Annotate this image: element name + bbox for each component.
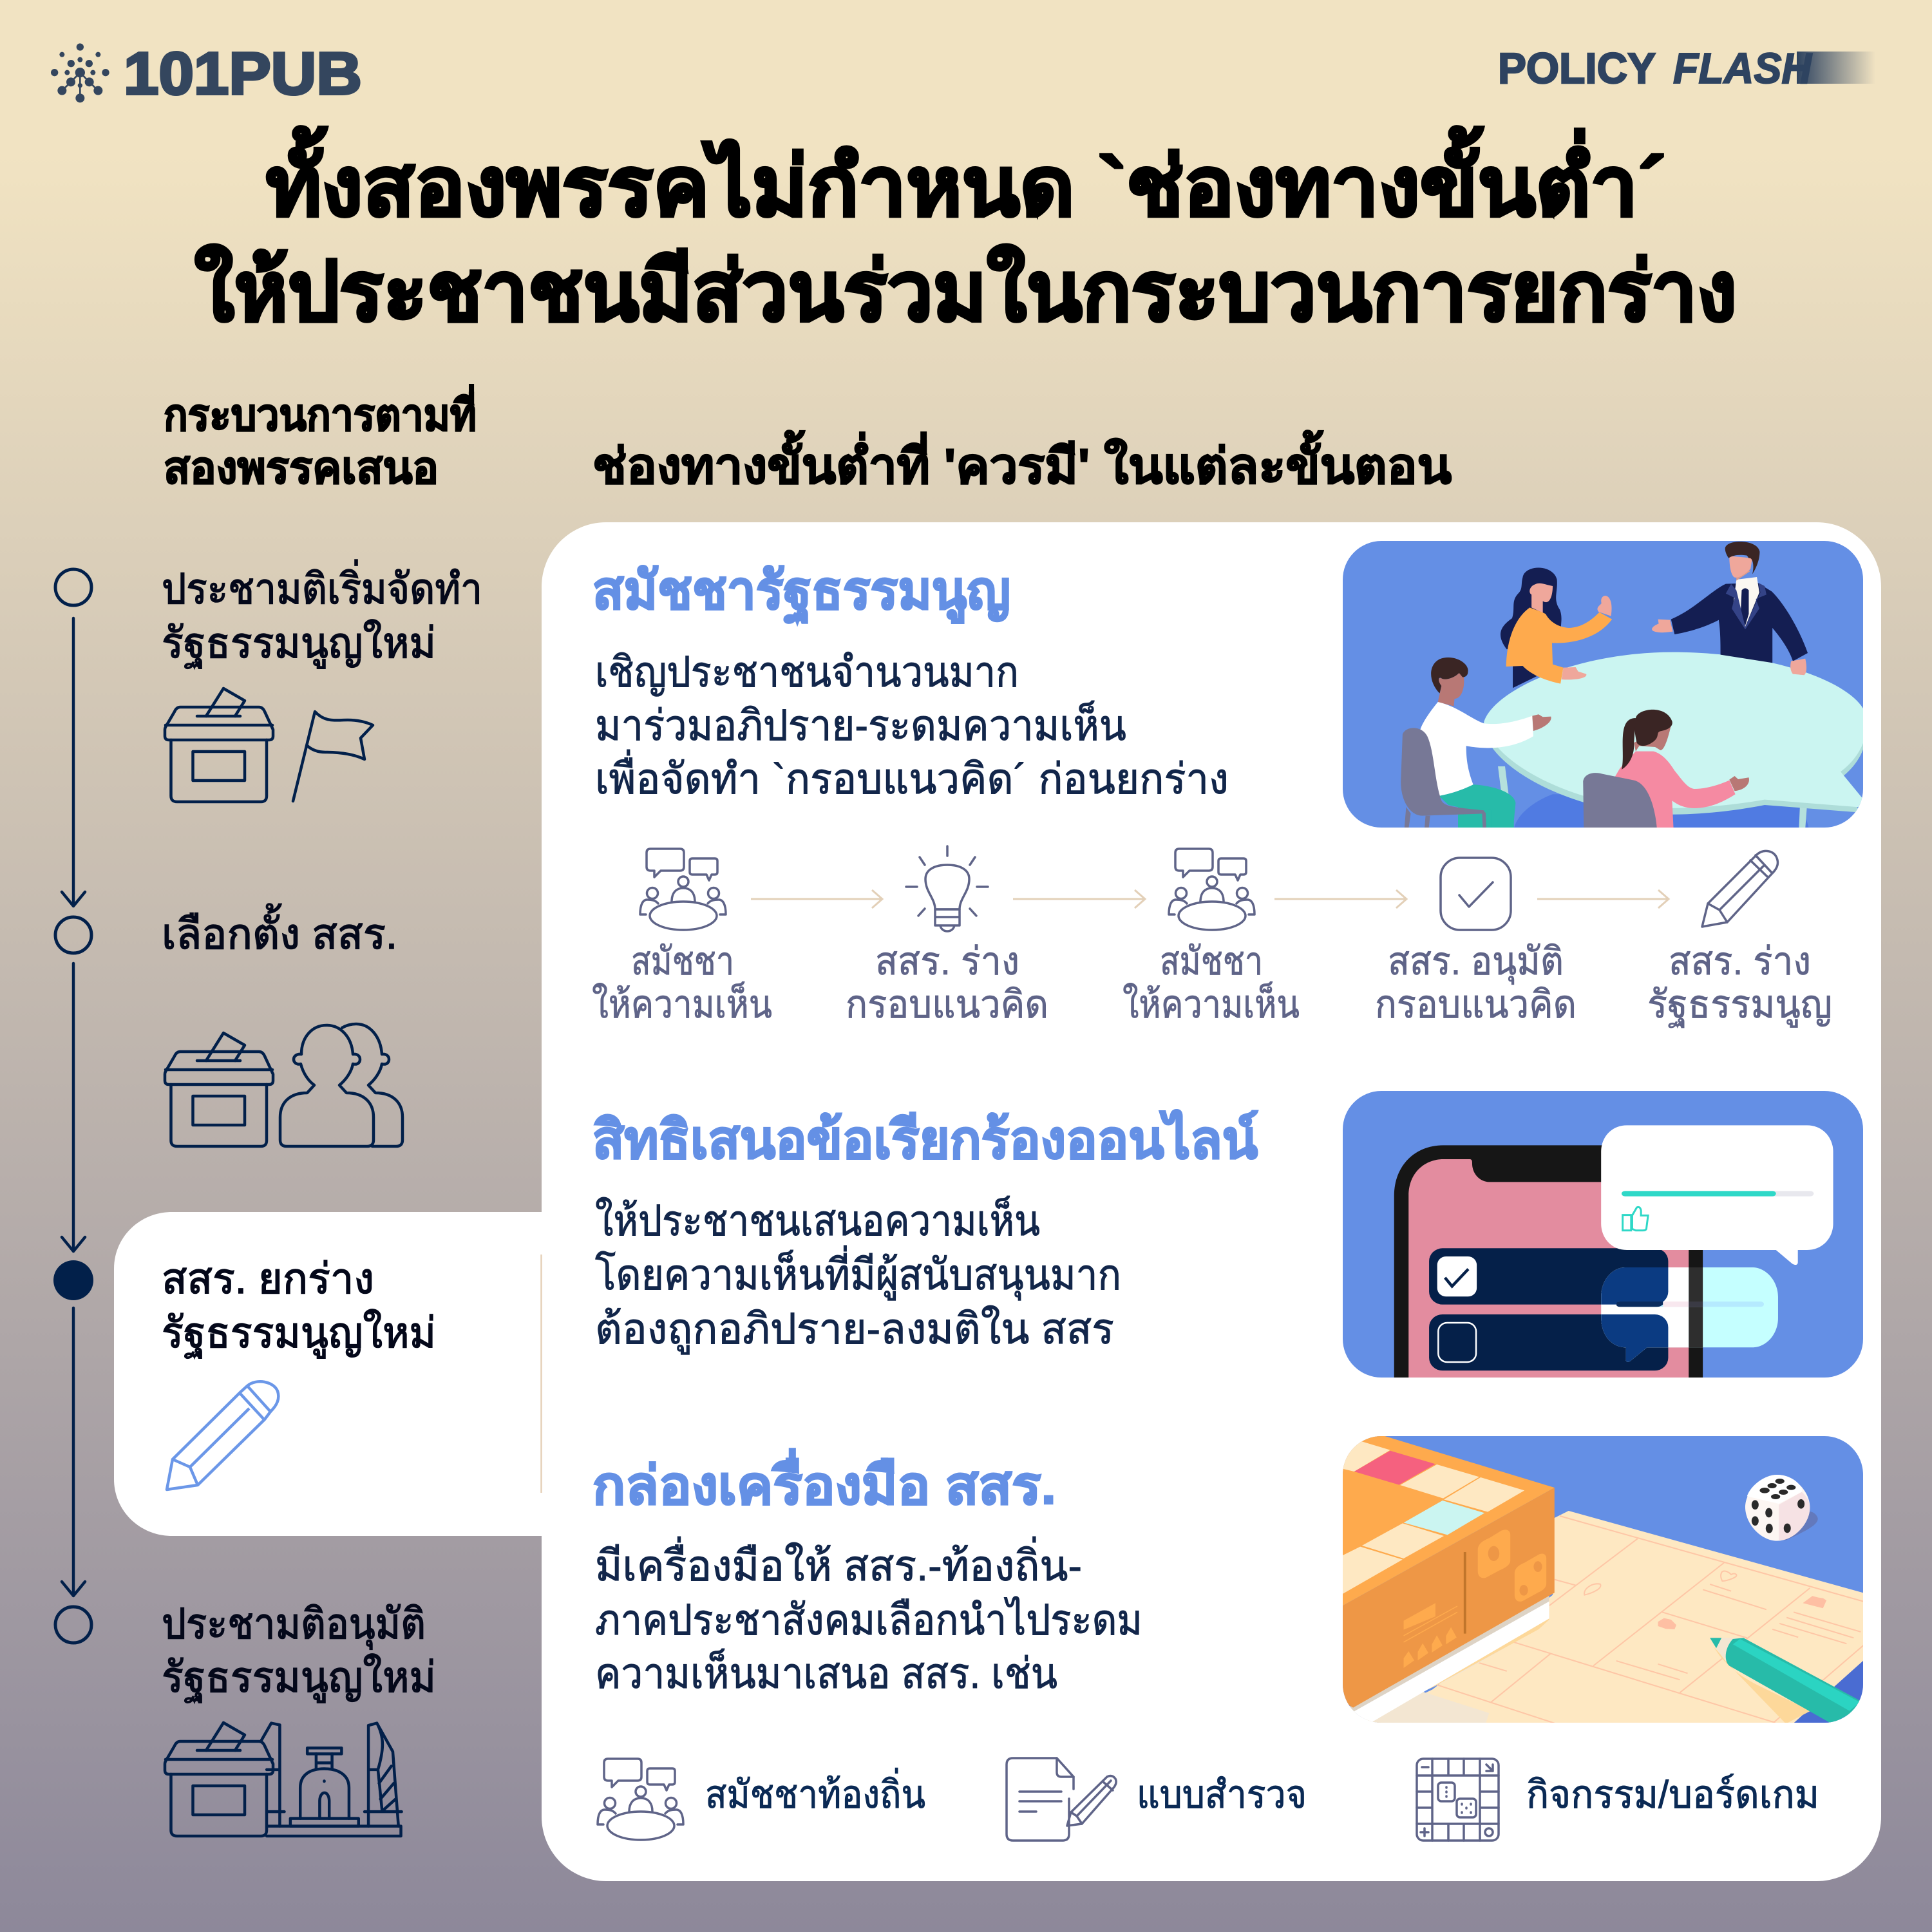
step: สสร. อนุมัติ: กรอบแนวคิด [1375, 983, 1577, 1026]
arrow [1013, 890, 1145, 908]
step: สมัชชาให้ความเห็น: ให้ความเห็น [592, 981, 772, 1026]
arrow 2 [62, 963, 85, 1251]
step: สมัชชาให้ความเห็น again: ให้ความเห็น [1122, 981, 1300, 1026]
woman in pink [1583, 710, 1749, 829]
man in suit [1652, 542, 1808, 675]
heading: right column: ช่องทางขั้นต่ำที่ 'ควรมี' ในแต่ละขั้นตอน [592, 430, 1452, 494]
step label 2: เลือกตั้ง สสร. [162, 904, 397, 958]
section body text: ความเห็นมาเสนอ สสร. เช่น [595, 1648, 1057, 1697]
step marker 2 [55, 917, 91, 953]
step label 4: รัฐธรรมนูญใหม่ [162, 1653, 436, 1703]
box top [1341, 1436, 1555, 1607]
section body text: เชิญประชาชนจำนวนมาก [595, 648, 1019, 696]
phone screen [1408, 1159, 1689, 1378]
step label 3 [162, 1255, 436, 1359]
tools row [598, 1758, 1819, 1841]
step marker 1 [55, 569, 91, 605]
man in white [1401, 658, 1551, 829]
icon: meeting [1169, 849, 1255, 930]
icon: blue pencil [167, 1381, 278, 1490]
tool: แบบสำรวจ [1007, 1758, 1307, 1841]
section: สมัชชารัฐธรรมนูญ [592, 562, 1229, 802]
icon: meeting [640, 849, 726, 930]
section body text: มาร่วมอภิปราย-ระดมความเห็น [595, 700, 1126, 749]
step: สมัชชาให้ความเห็น again: สมัชชา [1160, 940, 1263, 983]
series label: POLICY FLASH [1498, 44, 1875, 93]
board doodles [1721, 1571, 1736, 1581]
step label 1 [162, 560, 482, 669]
step: สมัชชาให้ความเห็น [592, 849, 772, 1026]
section body text: ให้ประชาชนเสนอความเห็น [595, 1195, 1040, 1244]
icon: board game [1417, 1759, 1499, 1841]
step: สสร. ร่างรัฐธรรมนูญ: รัฐธรรมนูญ [1647, 983, 1832, 1028]
section body text: เพื่อจัดทำ `กรอบแนวคิด´ ก่อนยกร่าง [595, 750, 1229, 802]
section heading: กล่องเครื่องมือ สสร. [592, 1448, 1056, 1515]
woman in orange [1501, 567, 1612, 688]
step label 3: สสร. ยกร่าง [162, 1255, 374, 1302]
pencil [1710, 1638, 1867, 1724]
step marker 3 active [53, 1260, 93, 1300]
title [194, 126, 1737, 338]
section heading: สิทธิเสนอข้อเรียกร้องออนไลน์ [592, 1110, 1258, 1170]
icon: meeting [598, 1759, 683, 1840]
step: สมัชชาให้ความเห็น: สมัชชา [631, 940, 734, 983]
logo: 101PUB [51, 40, 362, 107]
timeline [53, 569, 93, 1643]
heading: left column: สองพรรคเสนอ [164, 444, 439, 493]
step: สสร. ร่างรัฐธรรมนูญ [1647, 851, 1832, 1028]
icon: pencil [1702, 851, 1777, 927]
icon: light bulb [906, 846, 988, 931]
box side prints [1404, 1530, 1546, 1668]
arrow [751, 890, 882, 908]
die [1745, 1475, 1818, 1541]
title: ให้ประชาชนมีส่วนร่วมในกระบวนการยกร่าง [194, 245, 1737, 338]
section body text [595, 1195, 1121, 1355]
icon: ballot box and flag [165, 688, 373, 802]
step: สสร. อนุมัติ: สสร. อนุมัติ [1388, 940, 1564, 985]
arrow [1537, 890, 1669, 908]
step: สสร. ร่าง กรอบแนวคิด [846, 846, 1048, 1026]
panel: main white card [542, 522, 1881, 1881]
tool: สมัชชาท้องถิ่น [598, 1759, 925, 1840]
tool: กิจกรรม/บอร์ดเกม: กิจกรรม/บอร์ดเกม [1526, 1773, 1819, 1816]
icon: ballot box and parliament [165, 1723, 402, 1836]
section body text [595, 1537, 1142, 1697]
step: สมัชชาให้ความเห็น again [1122, 849, 1300, 1026]
arrow 3 [62, 1308, 85, 1596]
step: สสร. อนุมัติ [1375, 858, 1577, 1026]
panel: highlighted step tab [114, 1212, 544, 1536]
series label: POLICY FLASH: FLASH [1673, 44, 1813, 93]
title: ทั้งสองพรรคไม่กำหนด `ช่องทางขั้นต่ำ´ [266, 126, 1666, 233]
board grid lines [1434, 1516, 1867, 1724]
series label: POLICY FLASH: POLICY [1498, 44, 1656, 93]
heading: left column: กระบวนการตามที่ [164, 384, 477, 440]
illustration: phone with poll and comment bubbles [1343, 1091, 1863, 1378]
divider beside highlighted step [540, 1255, 542, 1493]
step label 1: ประชามติเริ่มจัดทำ [162, 560, 482, 612]
poll option checked [1429, 1248, 1668, 1305]
section body text: ภาคประชาสังคมเลือกนำไประดม [595, 1596, 1142, 1643]
section body text: ต้องถูกอภิปราย-ลงมติใน สสร [595, 1305, 1114, 1355]
logo wordmark: 101PUB [124, 40, 362, 107]
section body text: โดยความเห็นที่มีผู้สนับสนุนมาก [595, 1245, 1121, 1301]
arrow 1 [62, 618, 85, 906]
step: สสร. ร่างรัฐธรรมนูญ: สสร. ร่าง [1669, 940, 1811, 983]
phone frame [1394, 1145, 1703, 1378]
tool: แบบสำรวจ: แบบสำรวจ [1137, 1773, 1307, 1816]
paper layer under box [1354, 1647, 1505, 1723]
section body text: มีเครื่องมือให้ สสร.-ท้องถิ่น- [595, 1537, 1082, 1589]
icon: logo network dots [51, 43, 109, 102]
box side [1341, 1488, 1555, 1708]
step label 4 [162, 1600, 436, 1703]
illustration: board game box, board, die and pencil [1341, 1436, 1867, 1724]
step label 3: รัฐธรรมนูญใหม่ [162, 1309, 436, 1359]
comment bubble white [1601, 1125, 1833, 1265]
step: สสร. ร่าง กรอบแนวคิด: กรอบแนวคิด [846, 983, 1048, 1026]
step label 1: รัฐธรรมนูญใหม่ [162, 619, 436, 669]
step label 4: ประชามติอนุมัติ [162, 1600, 426, 1650]
table [1492, 743, 1863, 815]
comment bubble aqua [1601, 1267, 1778, 1362]
step: สสร. ร่าง กรอบแนวคิด: สสร. ร่าง [875, 940, 1019, 983]
icon: survey document and pencil [1007, 1758, 1116, 1841]
icon: approve check [1441, 858, 1511, 930]
step marker 4 [55, 1607, 91, 1643]
section: กล่องเครื่องมือ สสร. [592, 1448, 1142, 1697]
icon: ballot box and people [165, 1024, 402, 1146]
darker shadow under board [1794, 1661, 1863, 1723]
arrow [1274, 890, 1406, 908]
poll option empty [1429, 1314, 1668, 1370]
section heading: สมัชชารัฐธรรมนูญ [592, 562, 1010, 625]
section body text [595, 648, 1229, 802]
game board sheet [1362, 1511, 1867, 1724]
table legs [1498, 766, 1807, 829]
floor shadow [1514, 794, 1809, 829]
process flow [592, 846, 1832, 1028]
box top cells [1341, 1441, 1524, 1595]
section: สิทธิเสนอข้อเรียกร้องออนไลน์ [592, 1110, 1258, 1355]
tool: สมัชชาท้องถิ่น: สมัชชาท้องถิ่น [705, 1768, 925, 1816]
heading: left column [164, 384, 477, 493]
illustration: people around a speech-bubble table [1343, 541, 1867, 829]
tool: กิจกรรม/บอร์ดเกม [1417, 1759, 1819, 1841]
